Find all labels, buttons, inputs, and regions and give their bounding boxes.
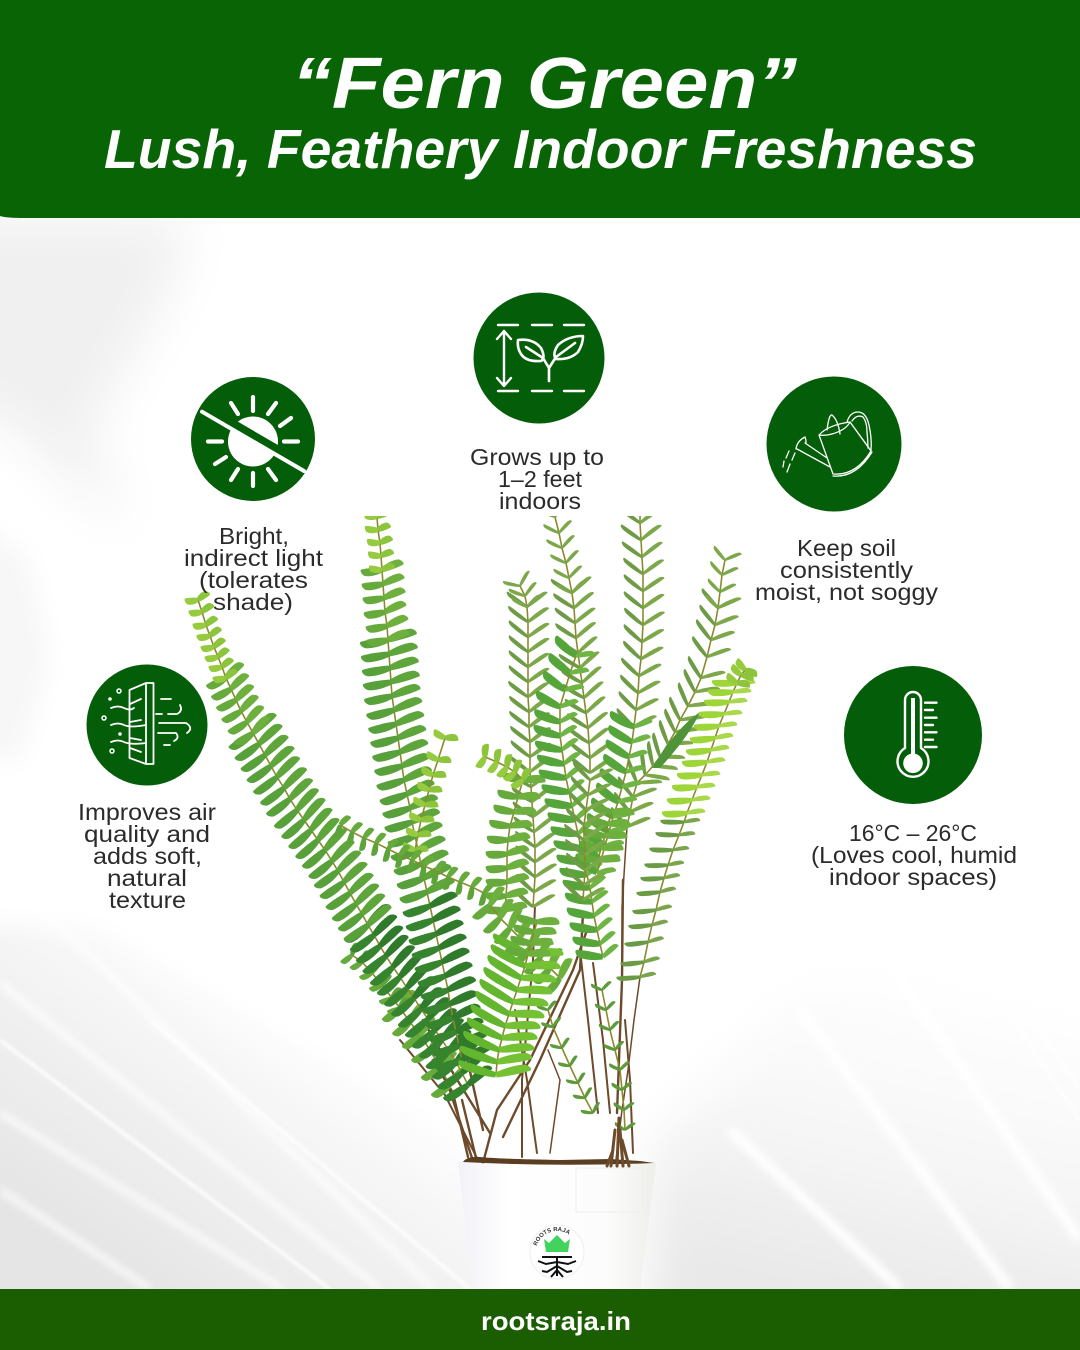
label: light <box>184 523 324 615</box>
frond: big left lower <box>368 925 468 1085</box>
frond: wide centre right <box>597 727 634 873</box>
header banner <box>0 0 1080 218</box>
frond: curved light tip <box>485 757 523 780</box>
icon: watering can <box>766 376 902 512</box>
fern plant in pot <box>184 516 758 1286</box>
frond: upright left tip <box>377 517 382 570</box>
label: air: texture <box>109 887 186 913</box>
frond: upright left upper <box>382 570 388 640</box>
frond: long dark leaflet <box>652 712 700 768</box>
logo divider <box>542 1256 572 1258</box>
frond: right arching tip <box>718 560 725 608</box>
frond: light small centre left <box>415 738 445 850</box>
frond: small left lower <box>400 1008 450 1085</box>
label: height: 1–2 feet <box>498 466 583 492</box>
frond: thin top right <box>634 510 643 727</box>
frond: bright tip <box>528 922 537 954</box>
label: water <box>755 535 939 605</box>
frond: far right lime upper <box>687 683 737 813</box>
logo crown <box>544 1235 570 1252</box>
icon: height growth <box>474 292 604 424</box>
label: water: Keep soil <box>797 535 896 561</box>
label: light: indirect light <box>184 545 324 571</box>
label: air: natural <box>107 865 187 891</box>
frond: lower cluster <box>490 905 560 978</box>
frond: thin top centre tip <box>555 517 572 593</box>
label: air: Improves air <box>78 799 216 825</box>
footer website: rootsraja.in <box>481 1306 631 1336</box>
pot tape <box>576 1168 643 1212</box>
frond: tiny stem leaves right <box>602 990 625 1130</box>
frond: side branch <box>340 825 484 893</box>
frond: thin herringbone left-centre <box>527 607 535 907</box>
label: temperature <box>811 820 1017 890</box>
frond: thin top centre <box>572 593 590 773</box>
frond: far right thin lower <box>640 813 687 977</box>
footer bar <box>0 1289 1080 1350</box>
label: height <box>470 444 604 514</box>
frond: right arching <box>627 608 718 827</box>
root clump <box>607 1118 629 1166</box>
label: air: adds soft, <box>93 843 202 869</box>
frond: upright left middle <box>388 640 427 892</box>
label: water: moist, not soggy <box>755 579 939 605</box>
subtitle: Lush, Feathery Indoor Freshness <box>104 118 977 180</box>
frond: big left tip <box>198 600 226 678</box>
frond: big left upper <box>226 678 253 733</box>
label: water: consistently <box>780 557 914 583</box>
frond: herringbone tip <box>520 586 527 607</box>
frond: bright front <box>496 954 528 1075</box>
pot <box>458 1162 656 1290</box>
stems <box>400 827 640 1163</box>
icon: no direct sun <box>191 377 315 501</box>
label: temperature: 16°C – 26°C <box>849 820 977 846</box>
logo text: ROOTS RAJA <box>533 1227 570 1246</box>
label: air <box>78 799 216 913</box>
frond: curved light green <box>505 780 523 910</box>
frond: tiny stem leaves <box>548 1010 593 1113</box>
frond: dark centre mass <box>598 812 612 860</box>
label: light: shade) <box>213 589 293 615</box>
frond: small left lower tip <box>352 955 400 1008</box>
label: light: Bright, <box>219 523 289 549</box>
frond: thin centre lower <box>583 780 590 900</box>
title: “Fern Green” <box>292 44 797 124</box>
soil <box>463 1157 654 1165</box>
label: height: Grows up to <box>470 444 604 470</box>
label: height: indoors <box>499 488 581 514</box>
icon: air filter <box>86 664 208 786</box>
clipped fronds <box>198 510 745 1130</box>
label: light: (tolerates <box>199 567 308 593</box>
pot logo <box>530 1224 584 1280</box>
frond: big left middle <box>253 733 368 925</box>
frond: upright left lower <box>427 892 462 1060</box>
label: temperature: indoor spaces) <box>829 864 997 890</box>
icon: thermometer <box>844 666 982 804</box>
frond: lime tip <box>737 670 745 683</box>
logo roots <box>538 1258 576 1277</box>
label: temperature: (Loves cool, humid <box>811 842 1017 868</box>
label: air: quality and <box>84 821 210 847</box>
frond: wide centre <box>560 656 603 957</box>
